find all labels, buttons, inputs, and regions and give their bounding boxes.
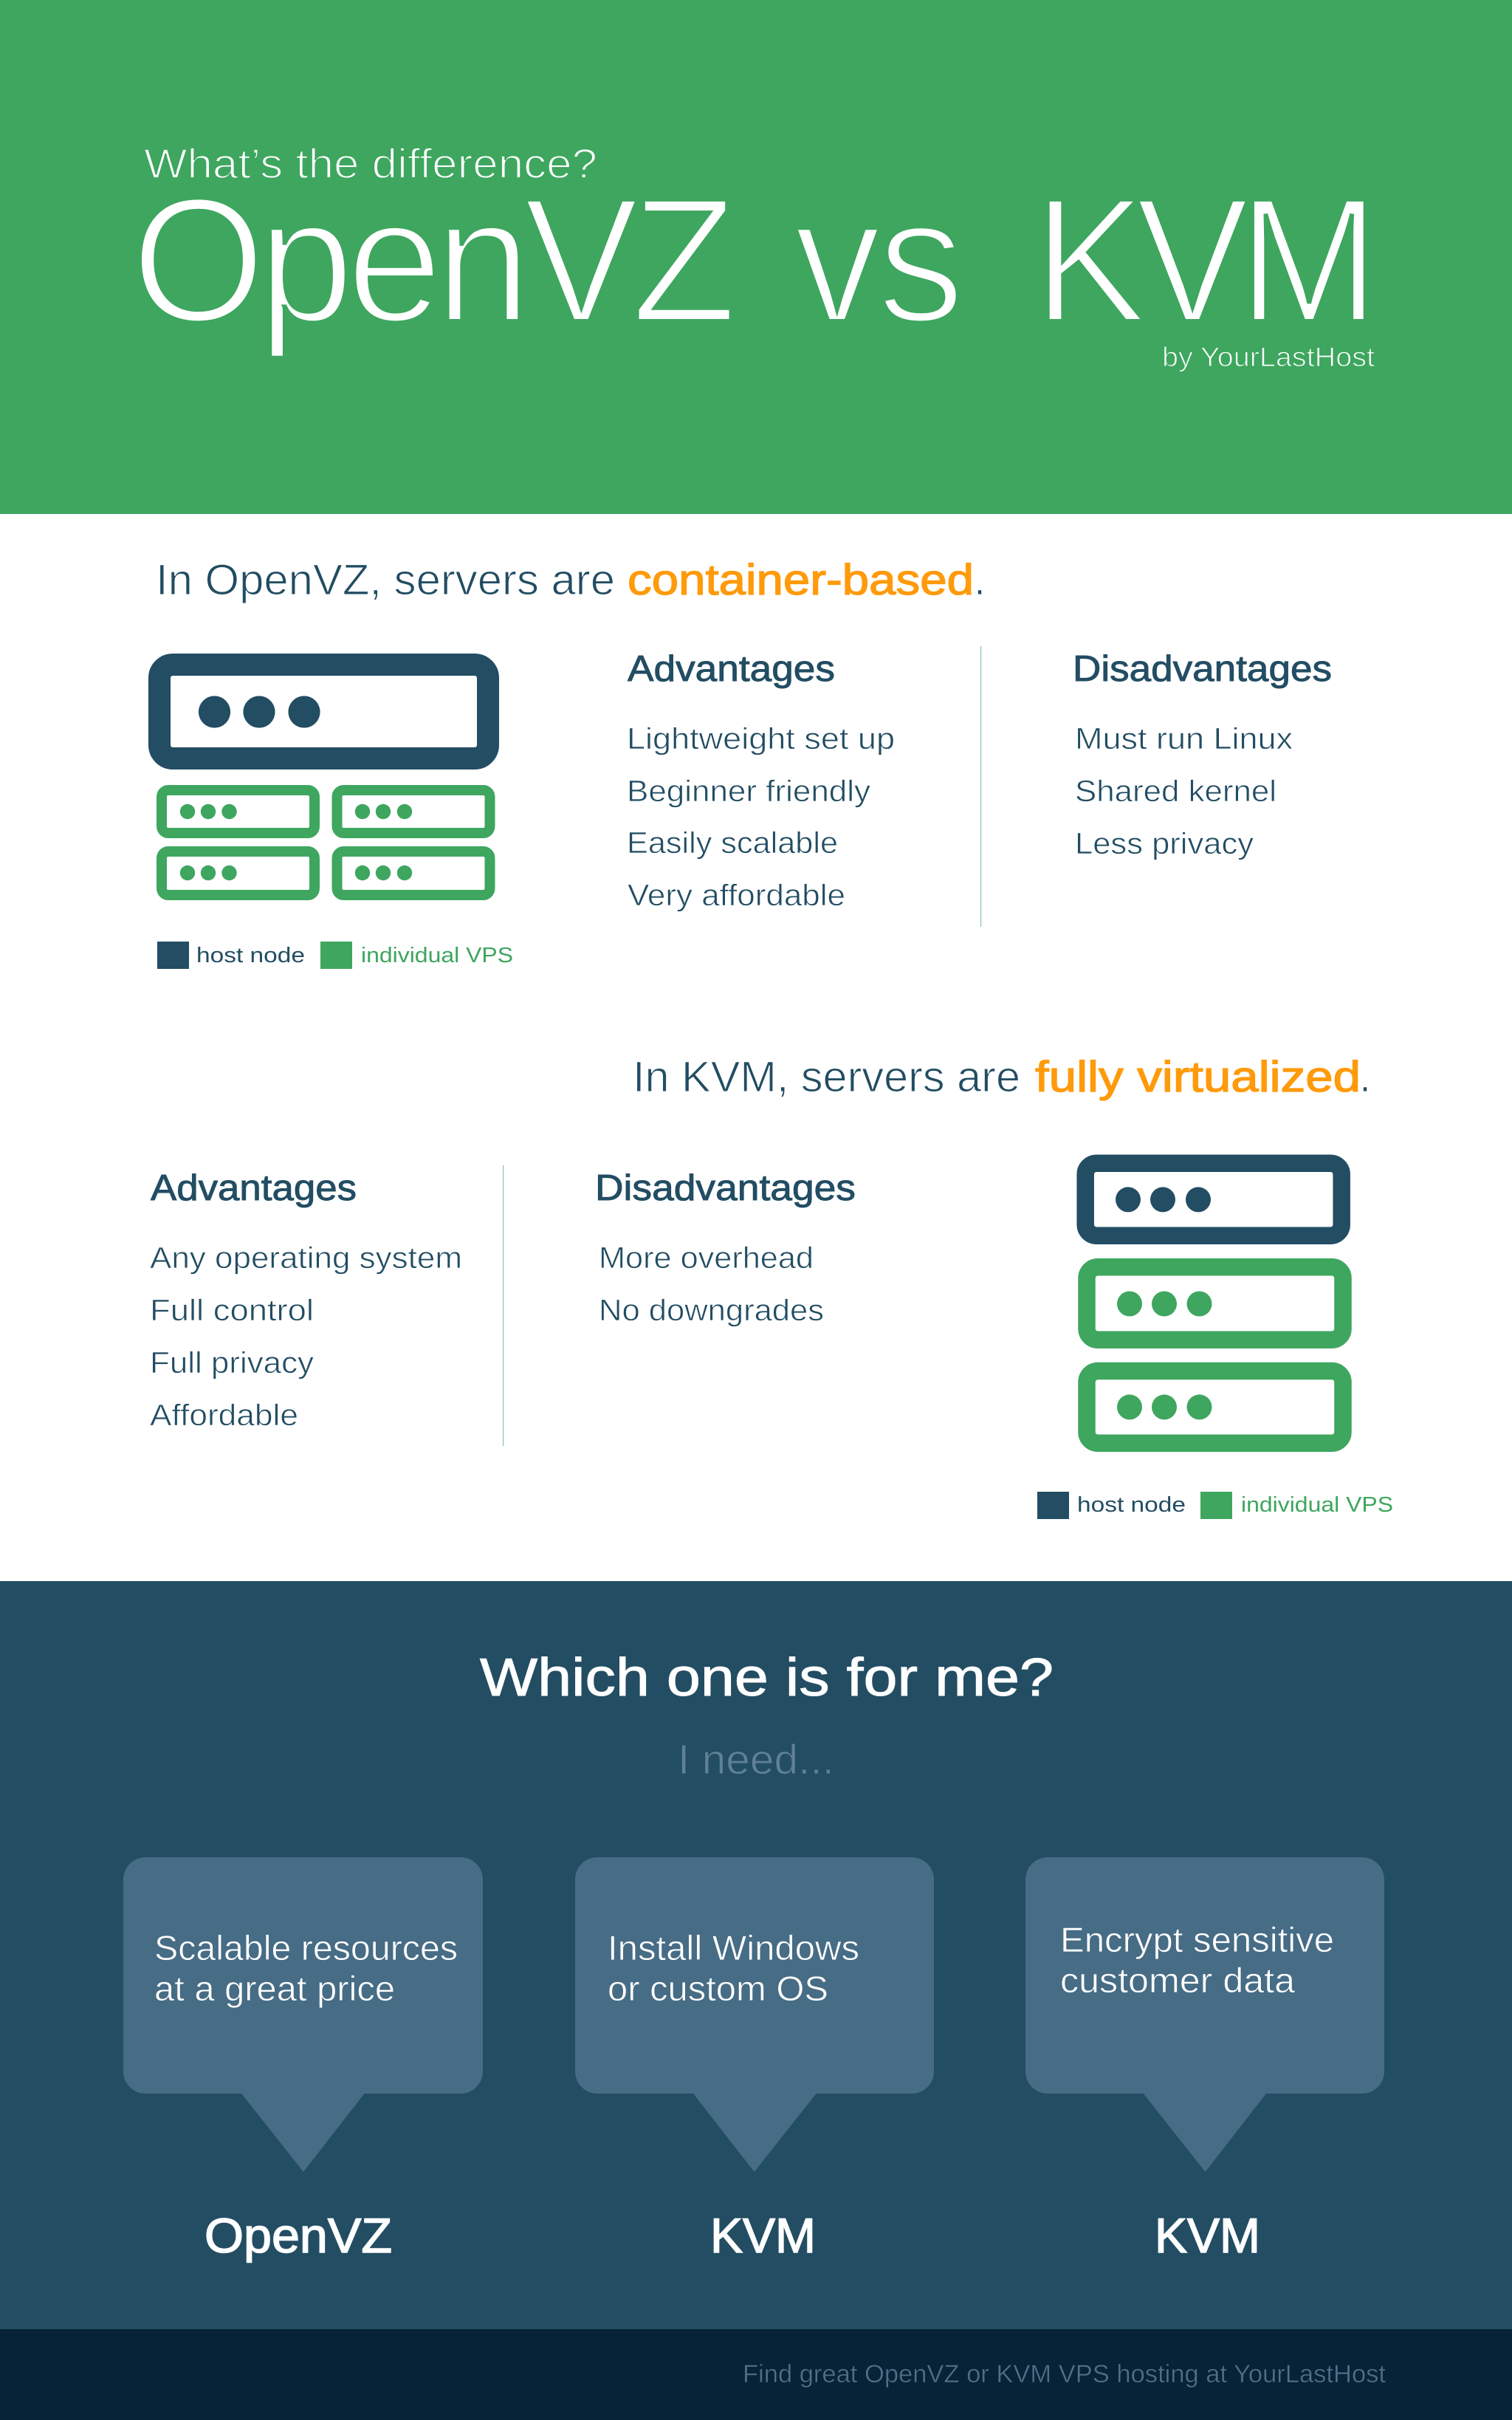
list: KVM disadvantages: Disadvantages bbox=[595, 1168, 856, 1208]
list: OpenVZ advantages bbox=[627, 649, 895, 912]
legend: OpenVZ bbox=[157, 942, 513, 969]
list: KVM advantages bbox=[150, 1168, 462, 1432]
legend: KVM bbox=[1037, 1492, 1393, 1519]
heading: OpenVZ bbox=[156, 556, 986, 604]
panel: OpenVZ section bbox=[156, 556, 1332, 969]
heading: OpenVZ: container-based bbox=[628, 556, 974, 604]
list: KVM advantages: Full control bbox=[150, 1293, 314, 1327]
list: KVM advantages: Full privacy bbox=[150, 1346, 315, 1379]
subtitle: What’s the difference? bbox=[144, 140, 597, 188]
list: KVM advantages: Affordable bbox=[150, 1398, 298, 1432]
list: OpenVZ advantages: Advantages bbox=[628, 649, 835, 689]
heading: which one: Which one is for me? bbox=[480, 1648, 1054, 1707]
legend: KVM: individual VPS bbox=[1241, 1493, 1393, 1517]
subheading: I need: I need... bbox=[678, 1736, 834, 1783]
answer: KVM: KVM bbox=[710, 2208, 816, 2263]
title: OpenVZ bbox=[131, 161, 732, 359]
heading: KVM bbox=[633, 1053, 1371, 1101]
list: KVM advantages: Advantages bbox=[151, 1168, 357, 1208]
heading: OpenVZ: . bbox=[974, 556, 986, 604]
answer: KVM: KVM bbox=[1155, 2208, 1260, 2263]
list: OpenVZ advantages: Very affordable bbox=[628, 878, 845, 912]
list: KVM disadvantages: No downgrades bbox=[599, 1293, 824, 1327]
heading: KVM: In KVM, servers are bbox=[633, 1053, 1020, 1101]
panel: header banner bbox=[0, 0, 1512, 514]
callout: encrypt data bbox=[1025, 1857, 1384, 2172]
callout: scalable resources bbox=[123, 1857, 483, 2172]
list: OpenVZ disadvantages: Shared kernel bbox=[1075, 774, 1276, 808]
icon: fully virtualized server stack bbox=[1085, 1163, 1343, 1443]
list: KVM advantages: Any operating system bbox=[150, 1241, 462, 1275]
title: KVM bbox=[1034, 161, 1369, 359]
callout: encrypt data: Encrypt sensitive bbox=[1060, 1920, 1334, 1959]
list: OpenVZ advantages: Easily scalable bbox=[627, 826, 838, 860]
callout: install windows: Install Windows bbox=[608, 1928, 859, 1967]
legend: OpenVZ: individual VPS bbox=[361, 944, 513, 967]
legend: KVM: host node bbox=[1077, 1493, 1186, 1517]
title: vs bbox=[794, 161, 961, 359]
heading: KVM: fully virtualized bbox=[1035, 1053, 1361, 1101]
panel: KVM section bbox=[150, 1053, 1393, 1519]
icon: container-based server diagram bbox=[159, 665, 490, 895]
list: KVM disadvantages: More overhead bbox=[599, 1241, 814, 1275]
list: KVM disadvantages bbox=[595, 1168, 856, 1327]
list: OpenVZ advantages: Lightweight set up bbox=[627, 721, 895, 755]
callout: scalable resources: Scalable resources bbox=[154, 1928, 458, 1967]
footer text: Find great OpenVZ or KVM VPS hosting at YourLastHost bbox=[743, 2360, 1386, 2388]
list: OpenVZ disadvantages: Must run Linux bbox=[1075, 721, 1293, 755]
list: OpenVZ disadvantages: Disadvantages bbox=[1073, 649, 1332, 689]
list: OpenVZ disadvantages: Less privacy bbox=[1075, 826, 1254, 860]
byline: by YourLastHost bbox=[1162, 342, 1375, 372]
callout: encrypt data: customer data bbox=[1060, 1961, 1296, 2000]
callout: install windows bbox=[575, 1857, 934, 2172]
answer: OpenVZ: OpenVZ bbox=[205, 2208, 392, 2263]
callout: scalable resources: at a great price bbox=[154, 1969, 395, 2008]
list: OpenVZ advantages: Beginner friendly bbox=[627, 774, 871, 808]
callout: install windows: or custom OS bbox=[608, 1969, 828, 2008]
list: OpenVZ disadvantages bbox=[1073, 649, 1332, 860]
heading: KVM: . bbox=[1359, 1053, 1371, 1101]
title bbox=[131, 161, 1369, 359]
legend: OpenVZ: host node bbox=[196, 944, 305, 967]
panel: footer bbox=[0, 2329, 1512, 2420]
heading: OpenVZ: In OpenVZ, servers are bbox=[156, 556, 615, 604]
panel: which one is for me bbox=[0, 1581, 1512, 2329]
